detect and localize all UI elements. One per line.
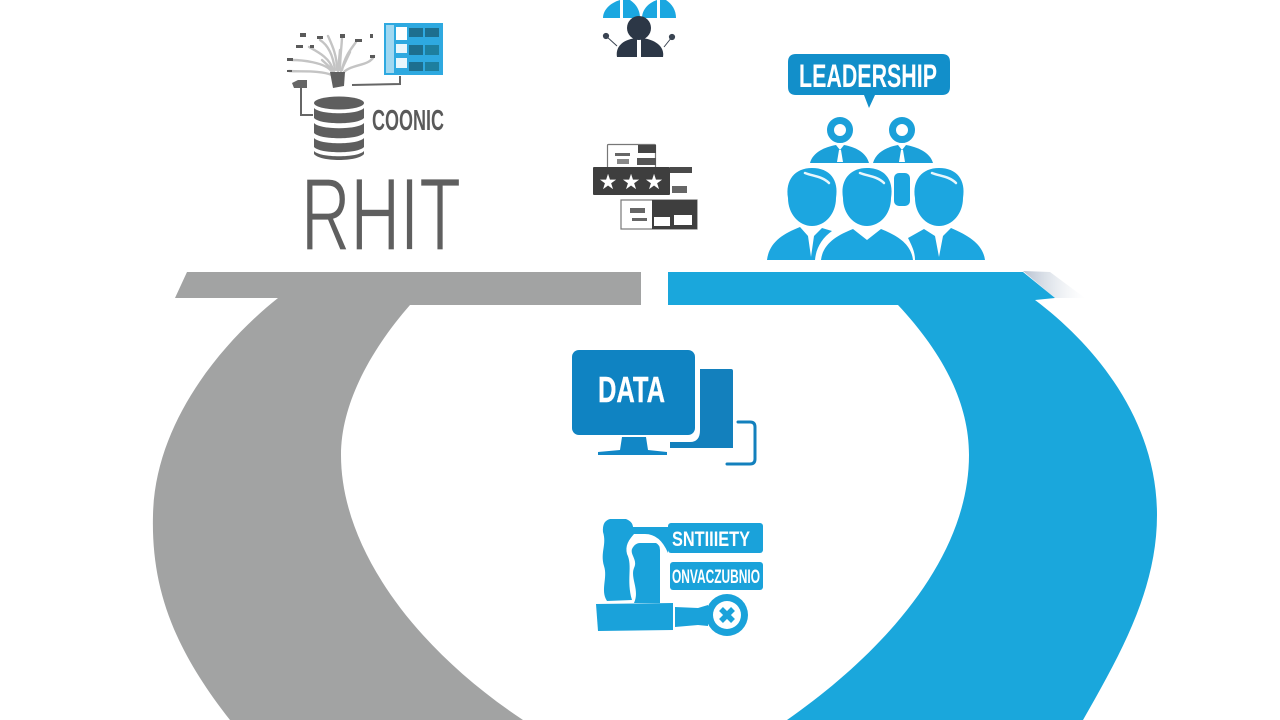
icon: bar neck: [675, 605, 708, 627]
icon: monitor stand: [598, 437, 667, 455]
stars: ★: [599, 171, 617, 194]
icon: bottom bar: [596, 603, 673, 631]
icon: database stack: [314, 96, 364, 160]
icon: data monitor: [572, 350, 755, 464]
icon: round badge with x: [706, 594, 748, 636]
card: upper outline: [608, 144, 656, 168]
heading: RHIT: RHIT: [301, 157, 461, 273]
icon: outer grip: [603, 519, 636, 601]
icon: radiating data lines: [289, 36, 374, 75]
stars: [599, 171, 663, 194]
icon: fan line endpoints: [287, 33, 375, 72]
icon: dark lead person: [617, 16, 663, 57]
label: DATA: DATA: [598, 369, 665, 410]
icon: inner block: [632, 543, 660, 603]
panel: blue curved band (Leadership side): [668, 271, 1157, 720]
card: lower outline: [621, 200, 697, 229]
icon: rating cards: [593, 144, 697, 229]
icon: rear screen: [670, 369, 733, 448]
icon: connector nodes: [603, 33, 675, 47]
icon: team with blue members and dark lead: [603, 0, 676, 57]
label: COONIC: COONIC: [372, 105, 444, 137]
icon: data fan and table: [287, 23, 443, 115]
icon: two back-row people: [810, 120, 933, 163]
icon: front screen: [572, 350, 695, 435]
icon: connector arch: [632, 527, 668, 553]
icon: hair highlights: [805, 173, 956, 183]
callout: LEADERSHIP speech bubble: [788, 54, 950, 108]
icon: leadership group: [767, 54, 985, 260]
icon: blue members: [603, 0, 676, 18]
callout: LEADERSHIP speech bubble: LEADERSHIP: [799, 58, 937, 94]
label: lower pill: ONVACZUBNIO: [672, 567, 760, 588]
panel: grey curved band (RHIT side): [153, 272, 641, 720]
icon: security tool with labels: [596, 519, 763, 636]
label: lower pill: [670, 562, 763, 590]
stars: ★: [622, 171, 640, 194]
icon: bracket: [727, 422, 755, 464]
stars: ★: [645, 171, 663, 194]
icon: blue data table: [384, 23, 443, 75]
card: dark star bar: [593, 167, 670, 195]
label: top pill: [668, 523, 763, 553]
icon: centre small panel: [894, 173, 910, 206]
label: top pill: SNTIIIETY: [672, 528, 750, 551]
icon: three front-row people: [767, 168, 985, 260]
icon: small connector box: [292, 80, 307, 88]
icon: hand: [330, 72, 345, 88]
icon: connector to table: [352, 76, 400, 85]
